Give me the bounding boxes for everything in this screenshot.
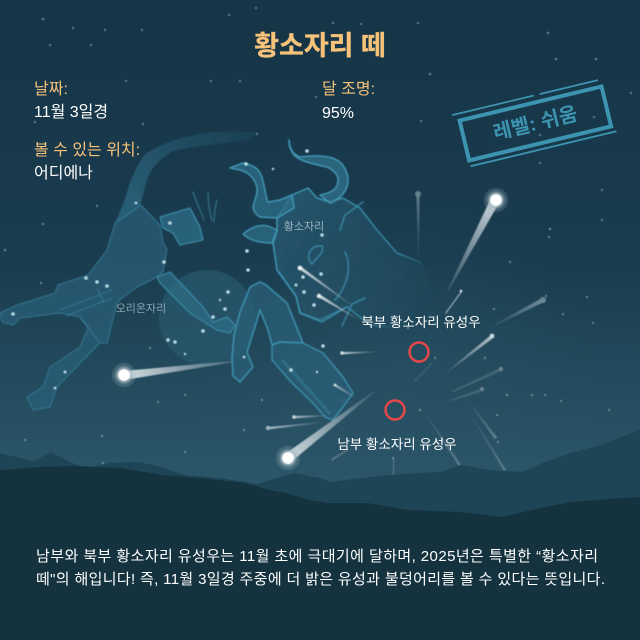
description text [36, 548, 605, 588]
front leg and chest [232, 282, 303, 382]
label: Orion: 오리온자리 [116, 302, 166, 315]
meteor: large north-east [447, 188, 508, 292]
ear left [243, 225, 277, 243]
title: 황소자리 떼 [254, 31, 386, 61]
info: date [34, 80, 108, 121]
raised arm and club [115, 131, 257, 224]
mountains: front range [0, 466, 640, 640]
body and legs [0, 205, 167, 410]
info: visibility: 어디에나 [34, 164, 93, 182]
radiant: southern [386, 400, 404, 420]
label: southern taurids: 남부 황소자리 유성우 [337, 437, 457, 452]
body [273, 188, 440, 330]
label: Taurus: 황소자리 [284, 220, 324, 233]
meteor: large south [276, 391, 375, 470]
info: moon illumination [322, 80, 375, 122]
description text: 남부와 북부 황소자리 유성우는 11월 초에 극대기에 달하며, 2025년은 특별한 “황소자리 [36, 548, 598, 565]
mountains: back range [0, 430, 640, 640]
outstretched arm [157, 272, 235, 333]
sword and belt [60, 288, 112, 343]
constellation: Taurus [230, 140, 440, 420]
right horn [289, 140, 348, 203]
description text: 떼"의 해입니다! 즉, 11월 3일경 주중에 더 밝은 유성과 불덩어리를 볼 수 있다는 뜻입니다. [36, 571, 605, 588]
info: moon illumination: 달 조명: [322, 80, 375, 98]
stamp: level easy: 레벨: 쉬움 [491, 102, 580, 145]
face details [277, 202, 365, 326]
shield disc [159, 270, 255, 366]
constellation: Orion [0, 131, 257, 410]
constellation stars [11, 149, 325, 389]
info: date: 날짜: [34, 80, 68, 98]
bent leg [272, 342, 353, 420]
small meteors [266, 191, 546, 478]
label: northern taurids: 북부 황소자리 유성우 [361, 315, 481, 330]
info: visibility: 볼 수 있는 위치: [34, 141, 140, 159]
info: moon illumination: 95% [322, 105, 354, 122]
background stars [4, 7, 632, 479]
head and hair [160, 208, 203, 245]
left horn [230, 163, 294, 218]
stamp: level easy [452, 79, 616, 168]
info: visibility [34, 141, 140, 182]
radiant: northern [410, 342, 428, 362]
meteor: large west [112, 361, 232, 387]
info: date: 11월 3일경 [34, 103, 108, 121]
